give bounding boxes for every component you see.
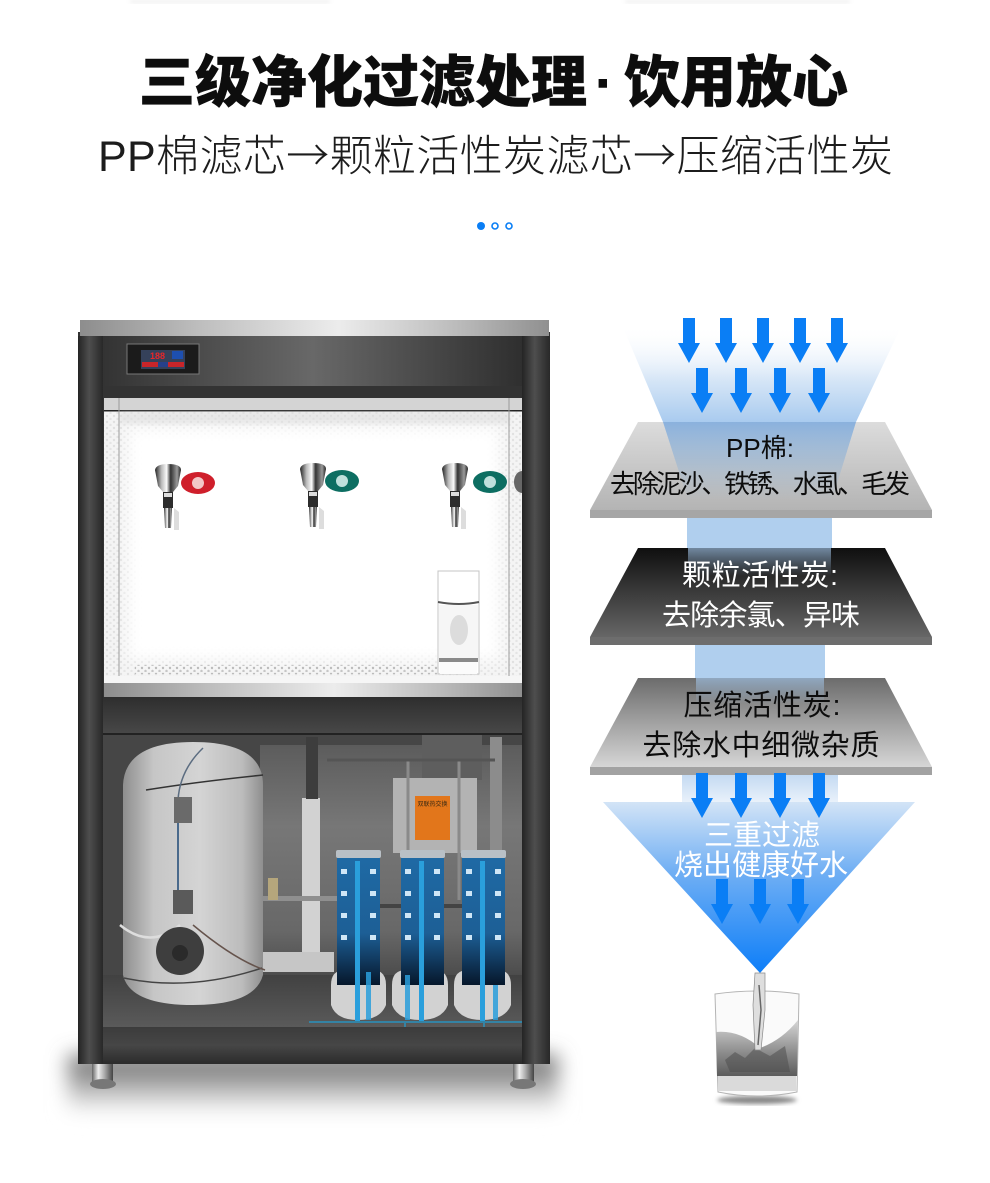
faucet 2 with green badge: [300, 463, 359, 529]
layer 1: PP cotton plate: [590, 422, 932, 518]
top arrows row 2: [691, 368, 830, 413]
compressed carbon label: 压缩活性炭:: [684, 689, 840, 722]
cabinet body: [78, 332, 550, 1064]
carbon label: 颗粒活性炭:: [682, 559, 838, 592]
subtitle: PP棉滤芯→颗粒活性炭滤芯→压缩活性炭: [98, 122, 893, 184]
dispensing window: [104, 398, 522, 683]
vertical white drain pipe: [262, 737, 334, 972]
layer 3: compressed activated carbon plate: [590, 678, 932, 775]
left foot: [90, 1064, 116, 1089]
digital display: 188: [150, 351, 165, 361]
left post: [78, 336, 103, 1064]
filter cartridge 1: [331, 850, 386, 1021]
arrows in triangle: [711, 879, 809, 924]
title: 饮用放心: [624, 51, 848, 114]
filtration funnel diagram: [590, 318, 932, 1104]
upper control panel: [103, 336, 522, 386]
digital display: [127, 344, 199, 374]
base kick plate: [103, 1027, 522, 1064]
lower compartment: [103, 733, 522, 1027]
filter cartridge 3: [454, 850, 511, 1021]
heat exchanger with orange label: 双联热交换: [417, 800, 448, 808]
faucet 3 with green badge: [442, 463, 522, 529]
faint top residual marks: [130, 0, 850, 3]
converging triangle: [603, 802, 915, 973]
layer 2: granular activated carbon plate: [590, 548, 932, 645]
connecting hose: [263, 878, 490, 908]
title: ·: [595, 51, 614, 114]
drinking glass: [438, 571, 479, 674]
compressed carbon description: 去除水中细微杂质: [642, 729, 880, 762]
heat exchanger with orange label: [327, 760, 495, 900]
triangle caption line 1: 三重过滤: [704, 819, 820, 852]
right post: [522, 336, 550, 1064]
PP cotton description: 去除泥沙、铁锈、水虱、毛发: [610, 469, 910, 499]
top light funnel: [622, 325, 902, 422]
pagination dots: [477, 222, 512, 230]
faucet 1 with red badge: [155, 464, 215, 530]
triangle caption line 2: 烧出健康好水: [674, 849, 848, 882]
right foot: [510, 1064, 536, 1089]
column between layer 2 and 3: [695, 645, 825, 678]
title: 三级净化过滤处理: [139, 51, 587, 114]
shelf edge: [104, 683, 522, 697]
filter cartridge 2: [392, 850, 448, 1021]
insulated hot water tank: [120, 742, 265, 1005]
arrows under layer 3: [691, 773, 830, 818]
PP cotton label: PP棉:: [726, 433, 794, 463]
floor shadow: [68, 1055, 558, 1113]
top arrows row 1: [678, 318, 848, 363]
water dispenser cabinet: [68, 320, 558, 1113]
carbon description: 去除余氯、异味: [662, 599, 860, 632]
top steel cap: [80, 320, 549, 336]
water flow lines: [309, 1022, 522, 1037]
glass of water with pouring stream: [715, 973, 799, 1104]
column between layer 1 and 2: [687, 518, 832, 548]
column below layer 3: [682, 775, 838, 803]
dark band under shelf: [103, 697, 522, 733]
